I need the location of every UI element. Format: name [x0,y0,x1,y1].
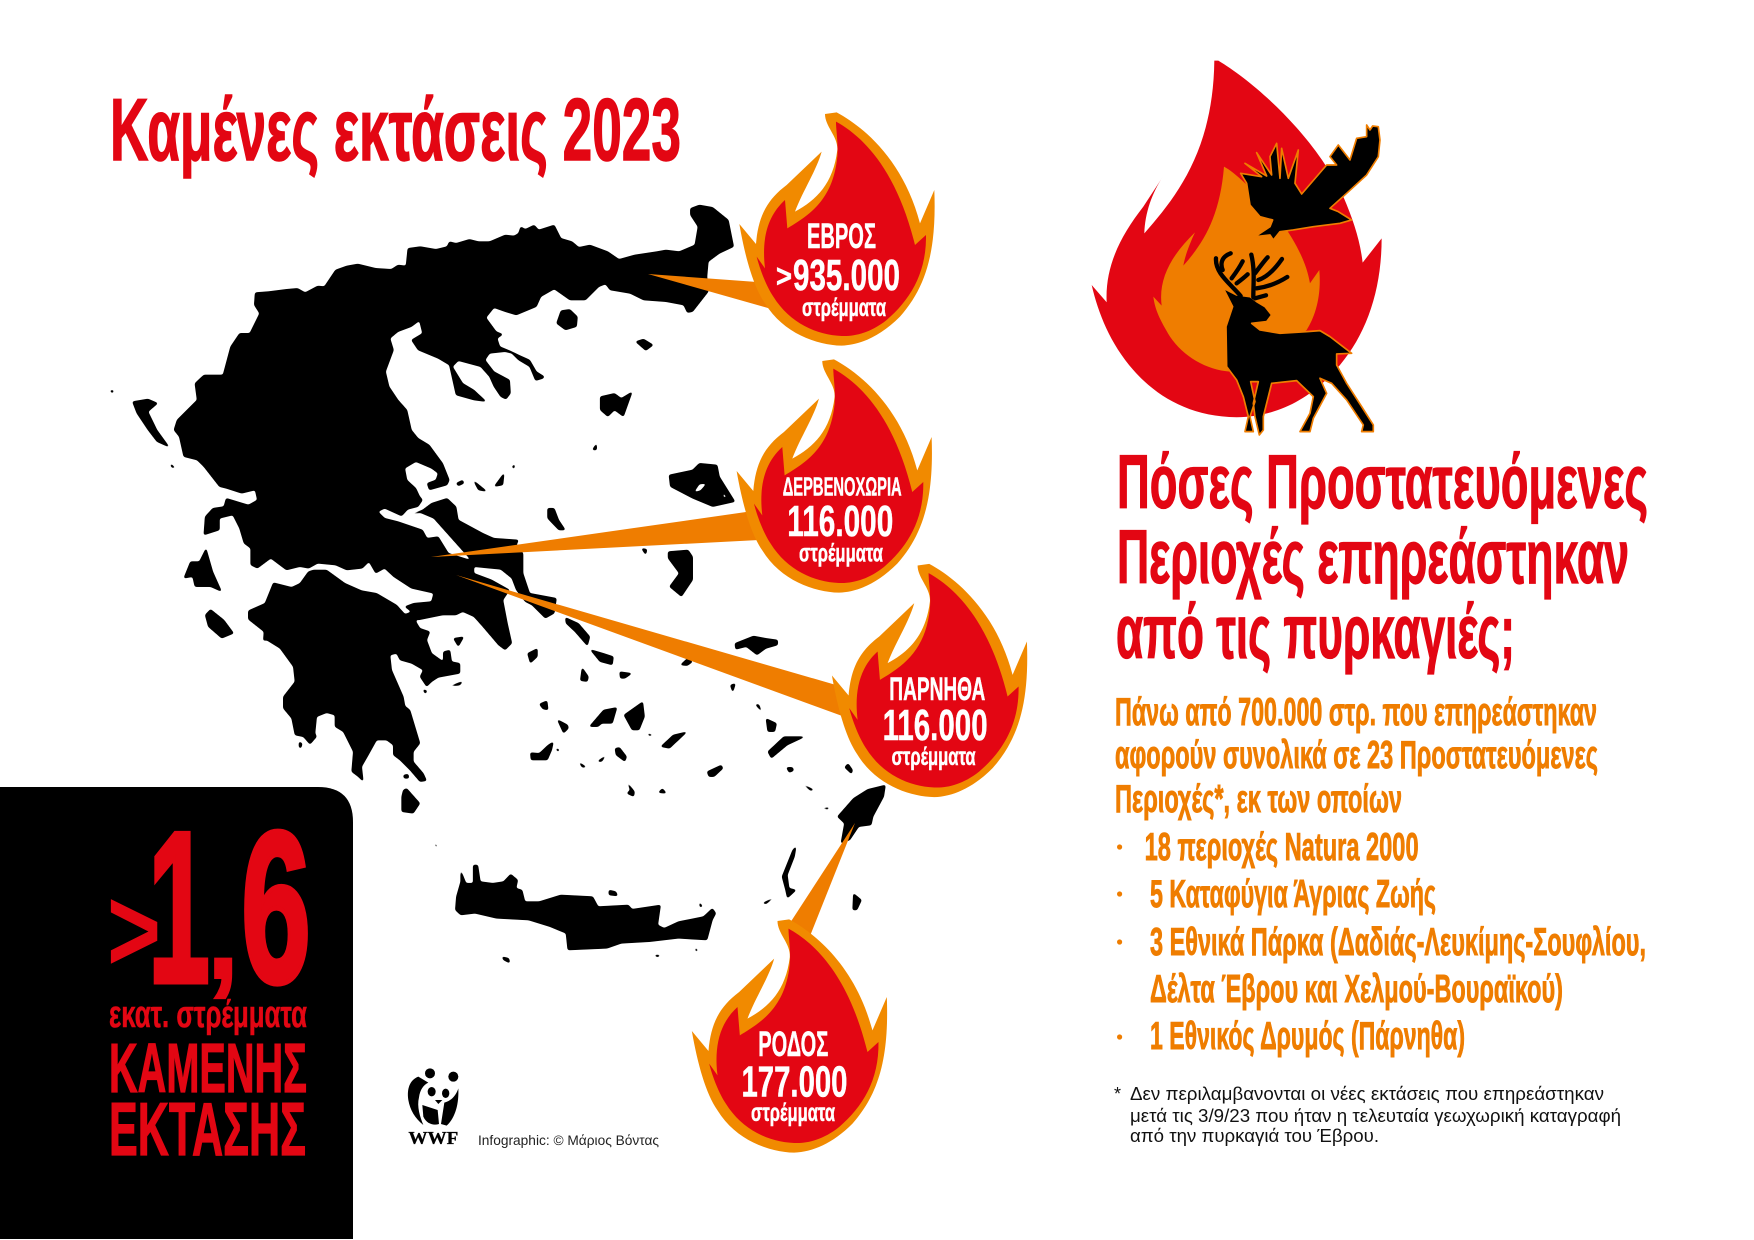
panel: total burned area: 1 [148,786,210,1028]
list: protected area types: 18 περιοχές Natura 2000 [1145,826,1419,869]
arrow: Dervenochoria [431,512,759,557]
arrow: Rhodes [790,823,855,936]
panel: total burned area: 6 [241,786,311,1028]
flame: Dervenochoria: στρέμματα [799,540,883,568]
flame: Parnitha: ΠΑΡΝΗΘΑ [889,671,985,707]
panel: total burned area [0,786,353,1239]
flame: Parnitha: στρέμματα [892,743,976,771]
arrow: Parnitha [456,575,845,717]
flame: Dervenochoria [737,359,932,593]
panel: total burned area: ΕΚΤΑΣΗΣ [109,1087,306,1171]
footnote: μετά τις 3/9/23 που ήταν η τελευταία γεωχωρική καταγραφή [1130,1106,1621,1126]
list: protected area types: 5 Καταφύγια Άγριας Ζωής [1150,873,1436,916]
panel: total burned area: εκατ. στρέμματα [109,994,307,1036]
icon: fire with eagle and deer [1092,61,1382,435]
text block: intro: Περιοχές*, εκ των οποίων [1115,778,1402,821]
flame: Evros: στρέμματα [802,294,886,322]
heading: protected areas question [1116,440,1648,675]
footnote: από την πυρκαγιά του Έβρου. [1130,1126,1379,1146]
footnote [1114,1084,1621,1146]
panel: total burned area: ΚΑΜΕΝΗΣ [109,1029,307,1107]
arrow: Evros [648,274,775,310]
flame: Parnitha [832,564,1027,797]
flame: Rhodes [692,919,887,1153]
list: protected area types [1117,826,1646,1058]
list: protected area types: 1 Εθνικός Δρυμός (Πάρνηθα) [1150,1015,1465,1058]
footnote: Δεν περιλαμβανονται οι νέες εκτάσεις που επηρεάστηκαν [1130,1084,1604,1104]
icon: WWF panda logo: WWF [408,1128,458,1148]
panel: total burned area: > [107,863,161,997]
flame: Rhodes: στρέμματα [751,1099,835,1127]
flame: Evros: 935.000 [793,251,900,300]
flame: Evros [739,112,935,346]
title: Καμένες εκτάσεις 2023 [110,80,681,179]
flame: Dervenochoria: ΔΕΡΒΕΝΟΧΩΡΙΑ [783,472,902,502]
text block: intro [1115,691,1598,821]
flame: Dervenochoria: 116.000 [787,497,893,546]
flame: Rhodes: 177.000 [742,1057,848,1106]
icon: WWF panda logo [408,1068,458,1148]
footnote: * [1114,1084,1121,1104]
flame: Rhodes: ΡΟΔΟΣ [758,1025,828,1064]
flame: Evros: > [776,258,792,294]
panel: total burned area: , [207,860,239,1006]
flame: Evros: ΕΒΡΟΣ [807,217,876,256]
flame: Parnitha: 116.000 [883,701,988,750]
map of Greece [110,205,886,963]
credit: Infographic: © Μάριος Βόντας [478,1132,659,1148]
